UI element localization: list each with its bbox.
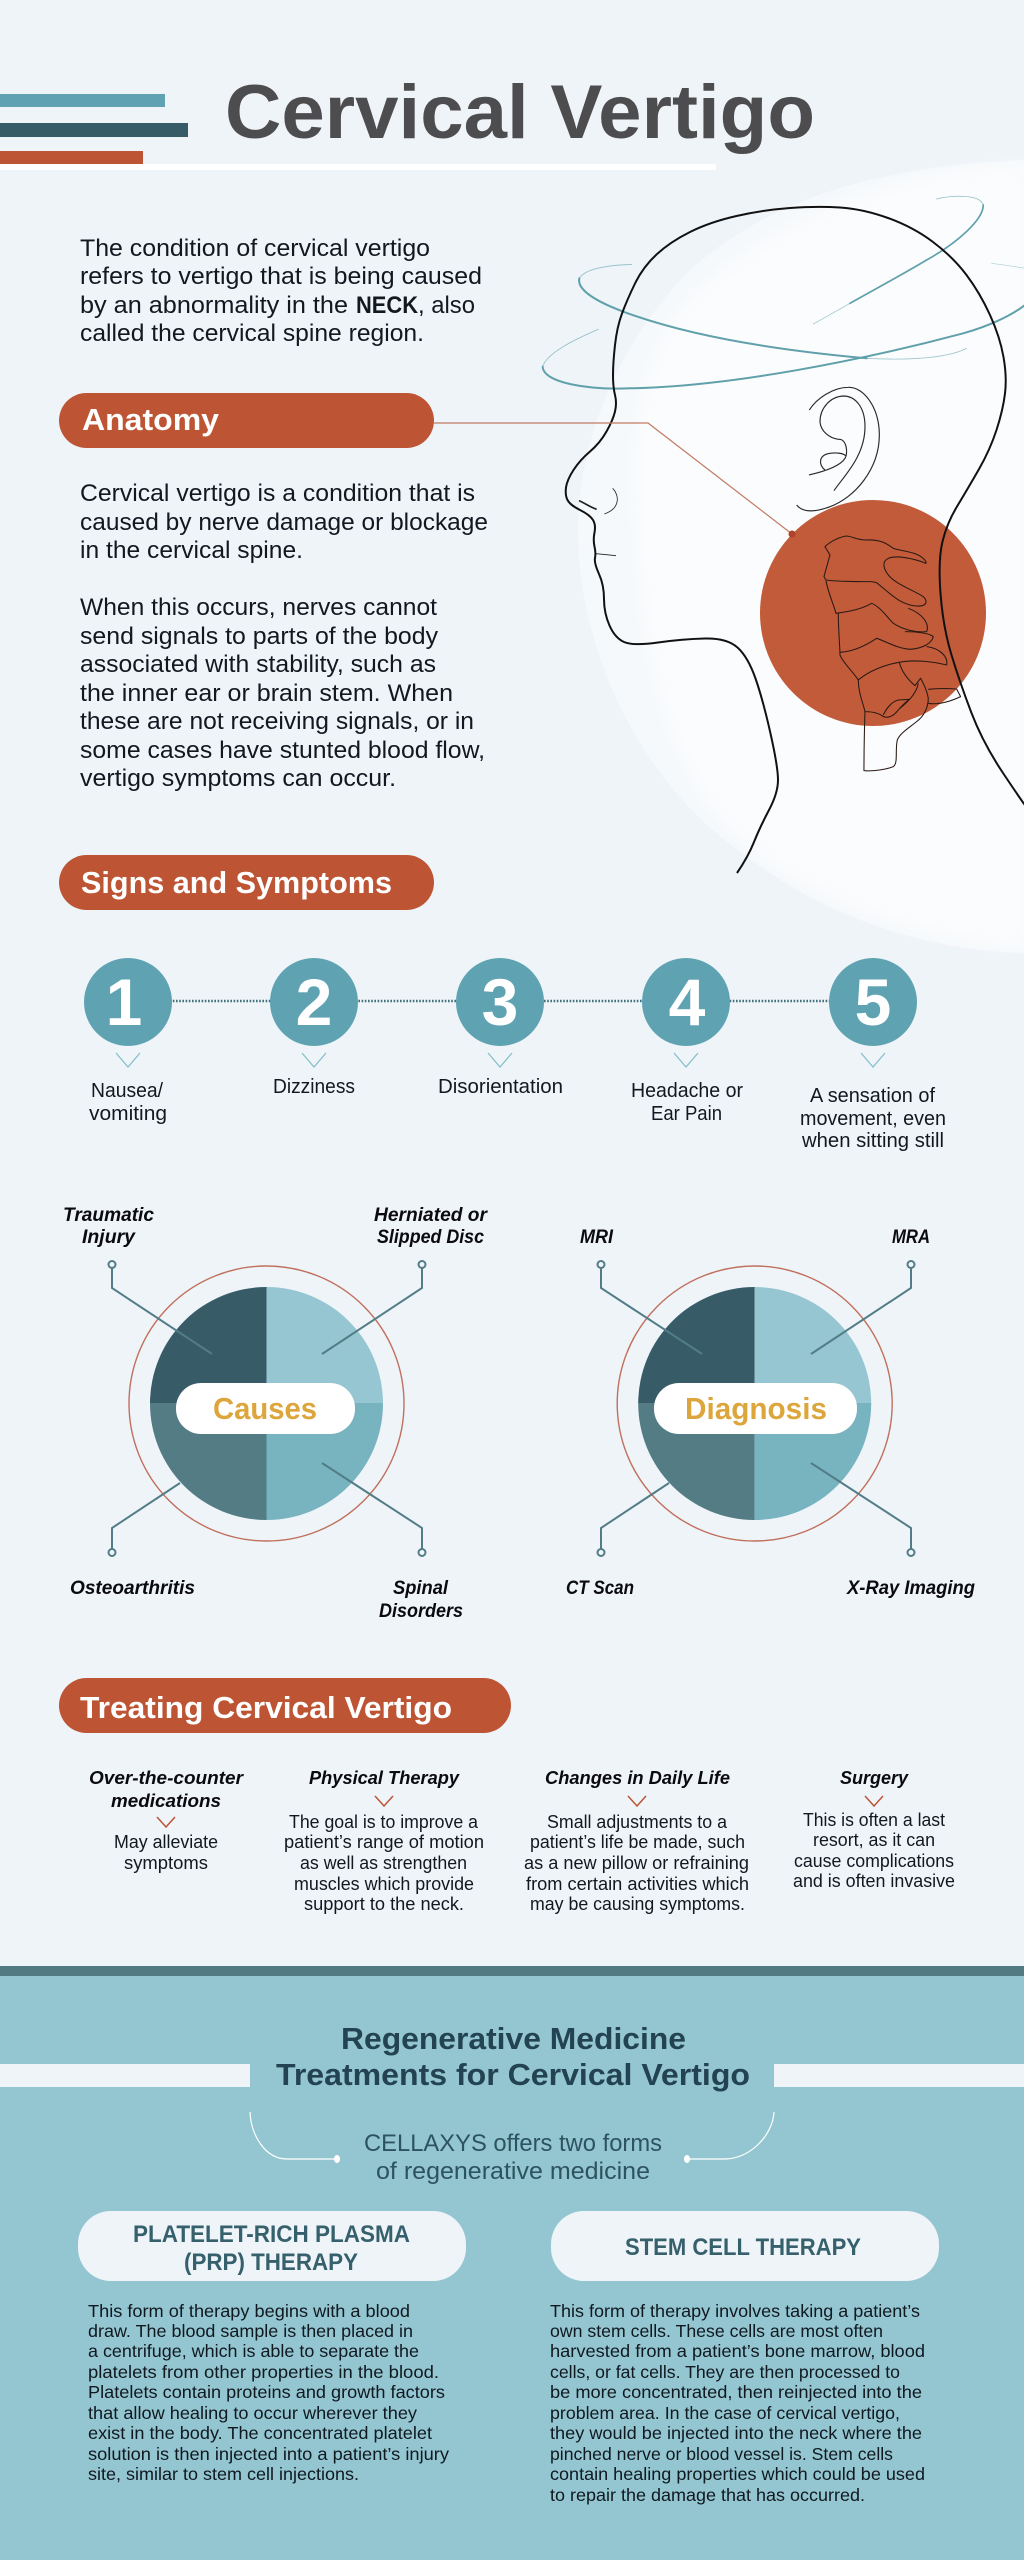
anatomy text: send signals to parts of the body	[80, 623, 439, 650]
treatment: changes in daily life: Small adjustments to a	[547, 1812, 728, 1832]
stem cell pill	[551, 2211, 939, 2281]
stem cell description: be more concentrated, then reinjected into the	[550, 2382, 922, 2402]
symptom 3: 3	[482, 965, 518, 1039]
treatment: physical therapy: patient’s range of motion	[284, 1832, 484, 1852]
symptom 5: A sensation of	[810, 1085, 935, 1107]
treatment: over-the-counter medications	[89, 1767, 245, 1873]
symptom 1	[84, 958, 172, 1125]
treatment: surgery: resort, as it can	[813, 1830, 935, 1850]
treatment: surgery: cause complications	[794, 1851, 954, 1871]
treatment: over-the-counter medications: medications	[111, 1790, 221, 1811]
anatomy text	[80, 480, 488, 792]
PRP description: site, similar to stem cell injections.	[88, 2464, 359, 2484]
header decorative bars	[0, 94, 716, 170]
regenerative subtitle: CELLAXYS offers two forms	[364, 2130, 662, 2157]
intro text: The condition of cervical vertigo	[80, 235, 430, 262]
symptom 2: Dizziness	[273, 1076, 355, 1098]
symptom 1: 1	[106, 965, 142, 1039]
symptoms timeline	[84, 958, 946, 1152]
treatment: changes in daily life: as a new pillow or refraining	[524, 1853, 749, 1873]
regenerative heading: Regenerative Medicine	[341, 2021, 686, 2056]
PRP description: Platelets contain proteins and growth factors	[88, 2382, 445, 2402]
cause: herniated disc: Herniated or	[374, 1205, 489, 1226]
head background blob	[578, 160, 1024, 953]
causes pie chart	[129, 1266, 404, 1541]
symptom 2: 2	[296, 965, 332, 1039]
causes connectors	[108, 1261, 426, 1556]
diagnosis: MRI: MRI	[580, 1227, 614, 1248]
treatment: surgery	[793, 1767, 955, 1891]
regenerative subtitle	[364, 2130, 662, 2185]
anatomy text: some cases have stunted blood flow,	[80, 737, 485, 764]
treatment: physical therapy: support to the neck.	[304, 1894, 464, 1914]
treatment: changes in daily life: Changes in Daily Life	[545, 1767, 730, 1788]
treatment: changes in daily life: patient’s life be made, such	[530, 1832, 745, 1852]
cause: spinal disorders: Disorders	[379, 1601, 463, 1622]
anatomy text: these are not receiving signals, or in	[80, 708, 474, 735]
symptom 1: Nausea/	[91, 1080, 163, 1102]
anatomy text: Cervical vertigo is a condition that is	[80, 480, 475, 507]
PRP pill: (PRP) THERAPY	[184, 2249, 358, 2276]
anatomy text: caused by nerve damage or blockage	[80, 509, 488, 536]
PRP description	[88, 2301, 449, 2484]
symptom 5: movement, even	[800, 1108, 946, 1130]
treatment: surgery: This is often a last	[803, 1810, 945, 1830]
PRP description: solution is then injected into a patient’s injury	[88, 2444, 449, 2464]
diagnosis connectors	[598, 1261, 914, 1556]
ear	[797, 387, 879, 511]
bracket left	[250, 2112, 340, 2163]
treatment: physical therapy: as well as strengthen	[300, 1853, 467, 1873]
PRP description: that allow healing to occur wherever they	[88, 2403, 417, 2423]
diagnosis: MRA: MRA	[892, 1227, 930, 1248]
anatomy text: associated with stability, such as	[80, 651, 436, 678]
symptom 3	[438, 958, 563, 1098]
PRP description: a centrifuge, which is able to separate the	[88, 2341, 419, 2361]
symptom 5	[800, 958, 946, 1152]
symptom 4: Headache or	[631, 1080, 743, 1102]
heading: treating cervical vertigo: Treating Cervical Vertigo	[80, 1690, 452, 1725]
stem cell description: to repair the damage that has occurred.	[550, 2485, 865, 2505]
nose and mouth details	[579, 488, 617, 556]
regenerative heading: Treatments for Cervical Vertigo	[276, 2057, 750, 2092]
stem cell description: they would be injected into the neck where the	[550, 2423, 922, 2443]
symptom 4	[631, 958, 743, 1125]
heading: treating cervical vertigo	[59, 1678, 511, 1733]
treatment: physical therapy	[284, 1767, 484, 1914]
panel: regenerative medicine	[0, 1966, 1024, 2560]
diagnosis pie chart	[617, 1266, 892, 1541]
symptom 3: Disorientation	[438, 1076, 563, 1098]
treatment: over-the-counter medications: symptoms	[124, 1853, 208, 1873]
treatment: physical therapy: Physical Therapy	[309, 1767, 461, 1788]
treatment: physical therapy: muscles which provide	[294, 1874, 474, 1894]
diagnosis diagram	[566, 1227, 975, 1599]
cause: spinal disorders: Spinal	[393, 1578, 449, 1599]
causes label pill	[176, 1383, 355, 1434]
cause: traumatic injury: Traumatic	[63, 1205, 154, 1226]
stem cell description: problem area. In the case of cervical vertigo,	[550, 2403, 900, 2423]
PRP description: platelets from other properties in the blood.	[88, 2362, 439, 2382]
treatment: surgery: and is often invasive	[793, 1871, 955, 1891]
heading: anatomy	[59, 393, 434, 448]
stem cell description	[550, 2301, 925, 2505]
intro text: NECK	[356, 292, 418, 319]
anatomy text: the inner ear or brain stem. When	[80, 680, 453, 707]
stem cell description: contain healing properties which could be used	[550, 2464, 925, 2484]
symptom 5: 5	[855, 965, 891, 1039]
PRP description: exist in the body. The concentrated platelet	[88, 2423, 432, 2443]
diagnosis: x-ray imaging: X-Ray Imaging	[846, 1578, 975, 1599]
anatomy text: in the cervical spine.	[80, 537, 303, 564]
treatment: changes in daily life: from certain activities which	[526, 1874, 749, 1894]
stem cell description: This form of therapy involves taking a patient’s	[550, 2301, 920, 2321]
PRP pill: PLATELET-RICH PLASMA	[133, 2221, 410, 2248]
diagnosis label pill: Diagnosis	[685, 1391, 827, 1426]
causes label pill: Causes	[213, 1391, 317, 1426]
intro text: by an abnormality in the	[80, 292, 348, 319]
intro text: called the cervical spine region.	[80, 320, 424, 347]
heading: anatomy: Anatomy	[82, 402, 220, 437]
symptom 2	[270, 958, 358, 1098]
PRP description: draw. The blood sample is then placed in	[88, 2321, 413, 2341]
anatomy text: When this occurs, nerves cannot	[80, 594, 437, 621]
regenerative heading	[276, 2021, 750, 2092]
cause: spinal disorders	[379, 1578, 463, 1622]
cause: traumatic injury: Injury	[82, 1227, 136, 1248]
treatment: over-the-counter medications: May alleviate	[114, 1832, 218, 1852]
treatment: changes in daily life	[524, 1767, 749, 1914]
cause: herniated disc: Slipped Disc	[377, 1227, 484, 1248]
cause: herniated disc	[374, 1205, 489, 1248]
regenerative subtitle: of regenerative medicine	[376, 2158, 650, 2185]
cause: traumatic injury	[63, 1205, 154, 1248]
symptom 4: 4	[669, 965, 706, 1039]
intro text	[80, 235, 482, 347]
stem cell description: harvested from a patient’s bone marrow, blood	[550, 2341, 925, 2361]
PRP pill	[78, 2211, 466, 2281]
stem cell description: pinched nerve or blood vessel is. Stem cells	[550, 2444, 893, 2464]
head outline	[566, 207, 1024, 873]
causes diagram	[63, 1205, 489, 1622]
cause: osteoarthritis: Osteoarthritis	[70, 1578, 195, 1599]
treatment: physical therapy: The goal is to improve a	[289, 1812, 479, 1832]
stem cell description: own stem cells. These cells are most often	[550, 2321, 883, 2341]
treatment: changes in daily life: may be causing symptoms.	[530, 1894, 745, 1914]
callout leader line	[434, 423, 796, 538]
bracket right	[684, 2112, 774, 2163]
head illustration	[434, 196, 1024, 873]
intro text: , also	[418, 292, 475, 319]
symptom 4: Ear Pain	[651, 1103, 722, 1125]
anatomy text: vertigo symptoms can occur.	[80, 765, 396, 792]
stem cell description: cells, or fat cells. They are then processed to	[550, 2362, 900, 2382]
stem cell pill: STEM CELL THERAPY	[625, 2234, 861, 2261]
PRP description: This form of therapy begins with a blood	[88, 2301, 410, 2321]
symptom 5: when sitting still	[801, 1130, 944, 1152]
diagnosis: CT scan: CT Scan	[566, 1578, 634, 1599]
cervical spine	[824, 536, 961, 771]
vertigo rings	[543, 196, 1024, 389]
heading: signs and symptoms: Signs and Symptoms	[81, 865, 392, 900]
heading: signs and symptoms	[59, 855, 434, 910]
symptom 1: vomiting	[89, 1103, 167, 1125]
intro text: refers to vertigo that is being caused	[80, 263, 482, 290]
diagnosis label pill	[654, 1383, 857, 1434]
treatment: surgery: Surgery	[840, 1767, 910, 1788]
treatment: over-the-counter medications: Over-the-counter	[89, 1767, 245, 1788]
title: Cervical Vertigo	[225, 70, 815, 155]
orange neck circle	[760, 500, 986, 726]
